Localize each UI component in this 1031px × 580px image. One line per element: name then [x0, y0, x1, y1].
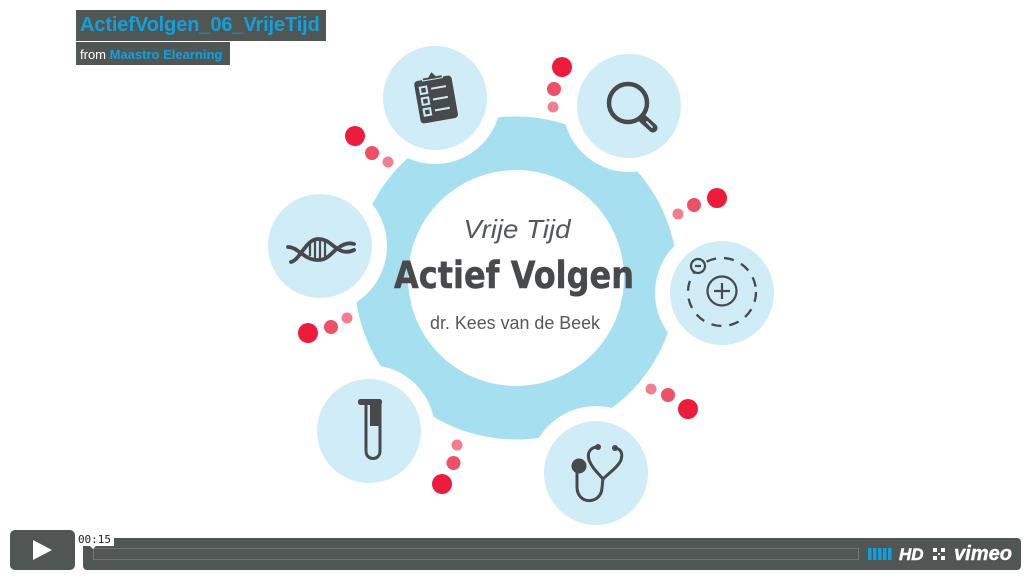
HD label: HD: [899, 545, 924, 564]
video controls: [10, 530, 1021, 570]
title: ActiefVolgen_06_VrijeTijd: [80, 14, 320, 36]
red dots: test tube: [432, 440, 462, 494]
progress track: [94, 548, 858, 560]
icon: magnifier: [577, 54, 681, 158]
vimeo logo text: vimeo: [954, 543, 1012, 565]
byline: from Maastro Elearning: [80, 47, 222, 62]
centre text: Actief Volgen: Actief Volgen: [394, 254, 634, 297]
icon: stethoscope: [544, 421, 648, 525]
icon: fullscreen: [933, 548, 945, 560]
icon: DNA helix: [268, 194, 372, 298]
progress bar: [83, 538, 1021, 570]
centre text: Vrije Tijd: Vrije Tijd: [464, 214, 572, 244]
gear ring: [253, 32, 789, 540]
red dots: stethoscope: [646, 384, 698, 419]
byline: [76, 42, 230, 65]
timecode: 00:15: [78, 533, 111, 546]
timecode pointer: [90, 546, 96, 549]
red dots: plus: [672, 188, 727, 220]
icon: test tube: [317, 379, 421, 483]
red dots: magnifier: [547, 57, 572, 112]
icon: plus and minus cell: [670, 241, 774, 345]
red dots: clipboard: [345, 126, 394, 168]
icon: clipboard: [383, 46, 487, 150]
icon: volume bars: [868, 548, 892, 560]
title: [76, 10, 326, 41]
red dots: DNA: [298, 312, 352, 343]
centre text: presenter: dr. Kees van de Beek: [430, 313, 601, 333]
play button: [10, 530, 75, 570]
